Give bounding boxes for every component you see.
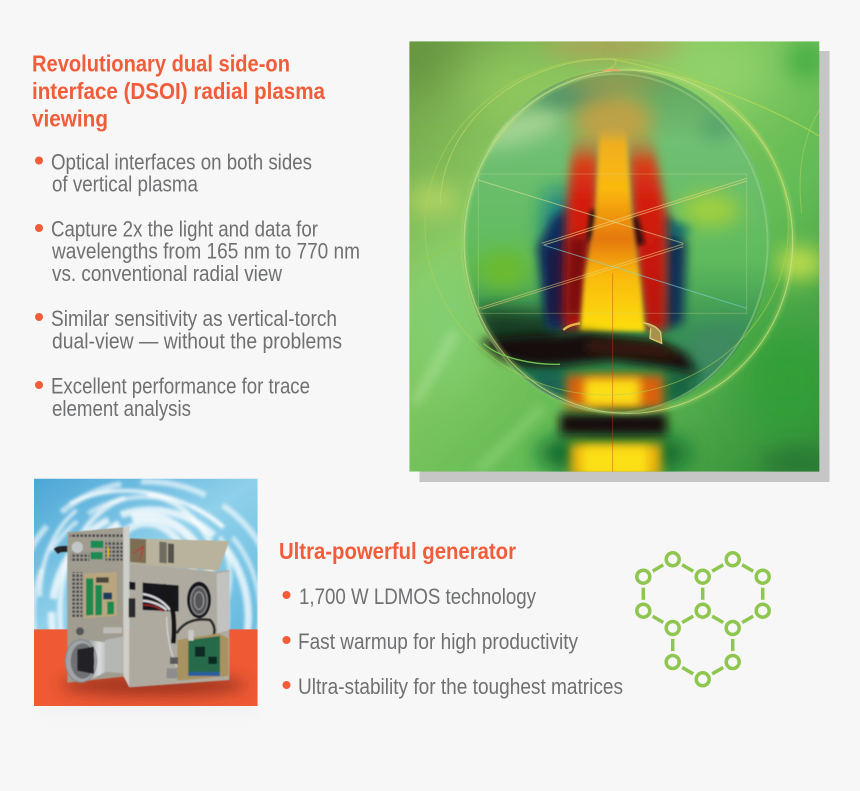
heading: generator: Ultra-powerful generator	[279, 538, 516, 564]
cables	[163, 585, 174, 643]
bullet: similar sensitivity: Similar sensitivity as vertical-torch	[51, 306, 337, 331]
heading: DSOI: Revolutionary dual side-on	[32, 50, 290, 76]
flame core	[580, 127, 645, 332]
red plasma	[563, 133, 599, 330]
torch base shadow	[477, 307, 560, 367]
bullet: trace element: element analysis	[52, 396, 191, 421]
swirl backdrop	[34, 479, 258, 632]
window	[143, 583, 179, 612]
bullet: capture 2x	[35, 216, 360, 286]
bullet: capture 2x: wavelengths from 165 nm to 770 nm	[51, 238, 360, 264]
sphere rings	[410, 58, 819, 413]
bullet: trace element	[35, 374, 310, 421]
heading: DSOI: viewing	[32, 106, 108, 132]
bullet: stability: Ultra-stability for the toughest matrices	[298, 674, 623, 699]
orange base	[34, 629, 258, 707]
top left board	[91, 541, 103, 548]
bullet: similar sensitivity: dual-view — without the problems	[52, 328, 342, 354]
bullet: capture 2x: Capture 2x the light and data for	[51, 216, 318, 242]
bullet: similar sensitivity	[35, 306, 342, 354]
torch band	[480, 332, 697, 373]
bullet: warmup: Fast warmup for high productivity	[298, 629, 579, 654]
panel: generator text	[279, 538, 623, 699]
dark halo around flame	[540, 190, 573, 237]
left board	[84, 572, 117, 618]
bullet: optical interfaces: Optical interfaces on both sides	[51, 150, 312, 174]
plasma glass sphere	[462, 70, 770, 413]
duct	[87, 640, 112, 682]
panel: DSOI text	[32, 50, 360, 421]
bullet: optical interfaces: of vertical plasma	[52, 172, 198, 196]
vent grid	[71, 572, 82, 617]
bullet: LDMOS: 1,700 W LDMOS technology	[299, 584, 537, 609]
image: generator	[34, 478, 258, 706]
reflection	[567, 375, 663, 408]
fan	[187, 582, 211, 618]
heading: DSOI	[32, 50, 325, 132]
orange haze above flame	[573, 93, 653, 150]
lower board	[177, 633, 228, 681]
bullet: capture 2x: vs. conventional radial view	[52, 261, 283, 286]
image: plasma with shadow	[387, 33, 840, 482]
heading: DSOI: interface (DSOI) radial plasma	[32, 78, 325, 104]
star lines	[478, 174, 747, 313]
bullet: optical interfaces	[35, 150, 312, 196]
generator chassis	[54, 526, 229, 687]
bullet: trace element: Excellent performance for trace	[51, 374, 310, 398]
icon: hexagon molecule	[632, 548, 774, 690]
torch ring	[563, 323, 580, 330]
